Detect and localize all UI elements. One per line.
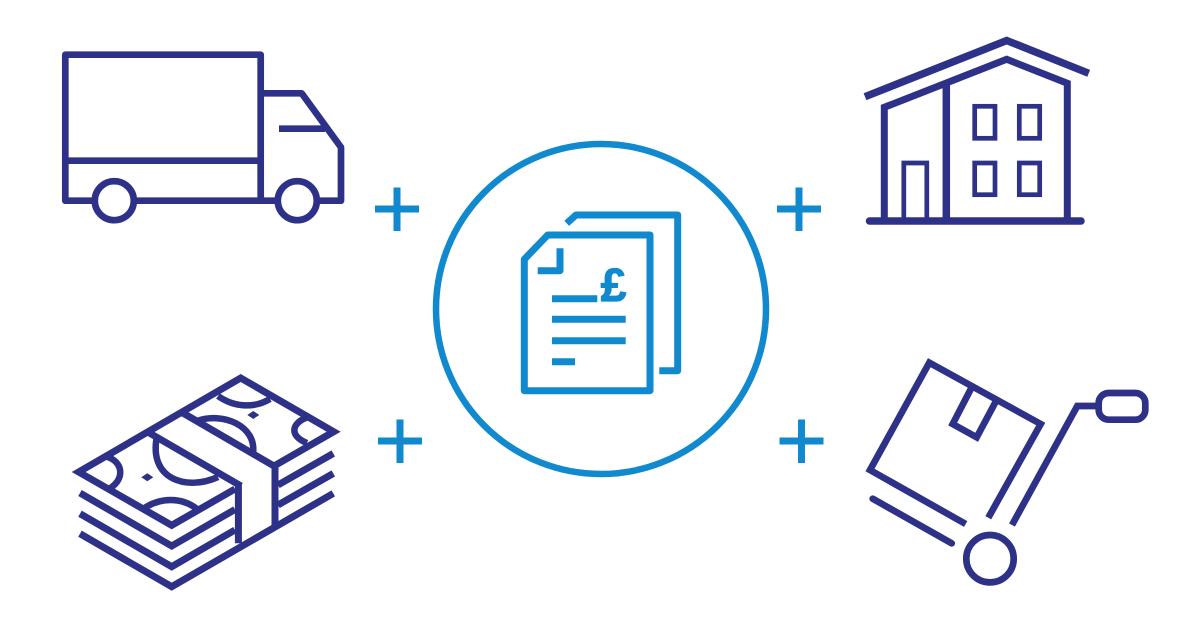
icon: warehouse building bbox=[865, 40, 1089, 221]
plus sign: top right bbox=[777, 188, 821, 231]
icon: delivery truck bbox=[65, 55, 341, 220]
plus sign: bottom right bbox=[780, 420, 824, 463]
icon: box on hand trolley bbox=[870, 363, 1145, 582]
pound sign: £ bbox=[601, 259, 627, 311]
plus sign: bottom left bbox=[378, 420, 422, 463]
central circle bbox=[436, 144, 766, 474]
icon: stack of banknotes bbox=[79, 378, 334, 587]
plus sign: top left bbox=[375, 188, 419, 231]
icon: invoice documents with pound sign bbox=[524, 215, 678, 391]
